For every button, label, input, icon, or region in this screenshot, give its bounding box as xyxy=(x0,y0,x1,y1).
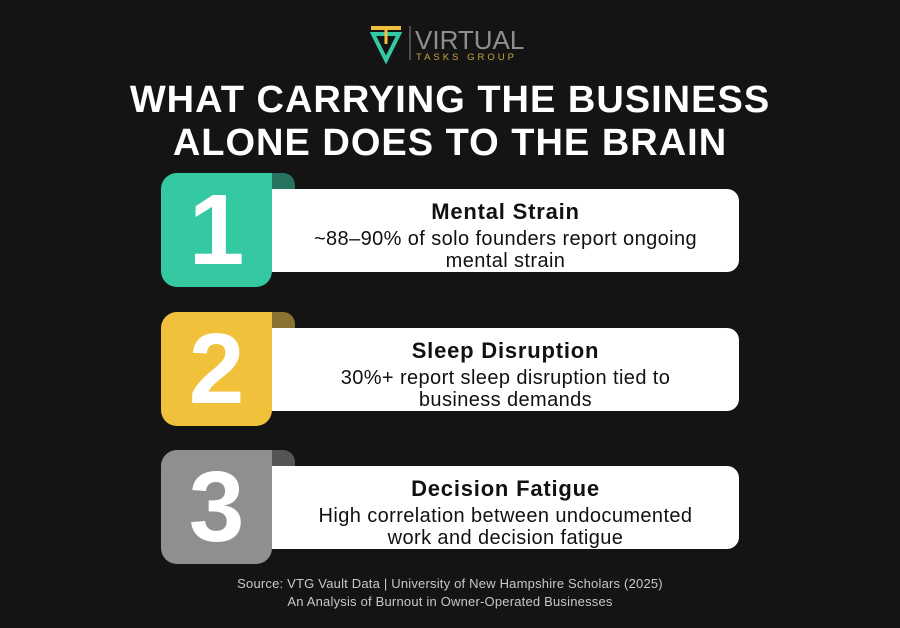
source: Source: VTG Vault Data | University of New Hampshire Scholars (2025) xyxy=(237,576,663,591)
source xyxy=(237,576,663,609)
item 1: Mental Strain xyxy=(431,199,580,224)
logo xyxy=(370,25,524,64)
logo: TASKS GROUP xyxy=(416,52,517,63)
title: ALONE DOES TO THE BRAIN xyxy=(173,122,727,164)
logo: VIRTUAL xyxy=(415,25,524,55)
item 2: Sleep Disruption xyxy=(412,338,599,363)
item 3: Decision Fatigue xyxy=(411,476,600,501)
item 1: ~88–90% of solo founders report ongoing xyxy=(314,228,697,250)
title xyxy=(130,79,770,164)
item 1: mental strain xyxy=(446,250,565,272)
source: An Analysis of Burnout in Owner-Operated Businesses xyxy=(287,594,613,609)
item 2: 30%+ report sleep disruption tied to xyxy=(341,367,670,389)
item 3: High correlation between undocumented xyxy=(319,505,692,527)
item 2: 2 xyxy=(189,313,244,425)
item 2: business demands xyxy=(419,389,592,411)
item 1 xyxy=(161,173,739,287)
icon: VTG mark xyxy=(371,26,401,60)
item 3 xyxy=(161,450,739,564)
item 3: 3 xyxy=(189,451,244,563)
item 1: 1 xyxy=(189,174,244,286)
item 3: work and decision fatigue xyxy=(388,527,623,549)
item 2 xyxy=(161,312,739,426)
title: WHAT CARRYING THE BUSINESS xyxy=(130,79,770,121)
